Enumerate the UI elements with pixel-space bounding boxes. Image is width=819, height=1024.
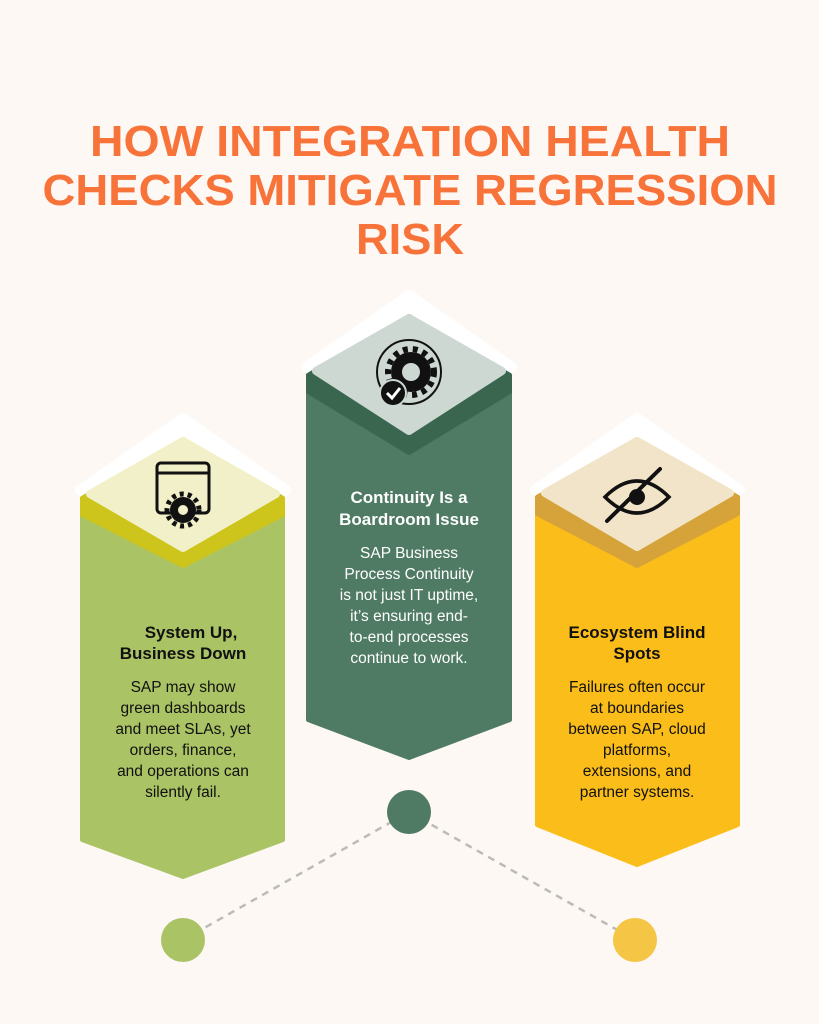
body text: it’s ensuring end- — [350, 608, 468, 625]
body text: between SAP, cloud — [568, 721, 706, 738]
dot: left — [161, 918, 205, 962]
body text: at boundaries — [590, 700, 684, 717]
dot: right — [613, 918, 657, 962]
title: HOW INTEGRATION HEALTH — [90, 117, 730, 166]
connector lines — [183, 812, 635, 940]
body text: and meet SLAs, yet — [115, 721, 251, 738]
heading: Ecosystem Blind — [568, 623, 706, 642]
icon: eye crossed — [605, 469, 669, 521]
icon: window with gear — [157, 463, 209, 526]
panel: ecosystem blind spots — [535, 418, 740, 865]
title: CHECKS MITIGATE REGRESSION — [42, 166, 778, 215]
body text: platforms, — [603, 742, 671, 759]
body text: SAP Business — [360, 545, 458, 562]
body text: continue to work. — [350, 650, 468, 667]
title: RISK — [356, 215, 464, 264]
dot: middle — [387, 790, 431, 834]
heading: Continuity Is a — [350, 488, 468, 507]
body text: to-end processes — [350, 629, 469, 646]
body text: orders, finance, — [130, 742, 236, 759]
heading: System Up, — [145, 623, 237, 642]
body text: Process Continuity — [344, 566, 474, 583]
heading: Business Down — [120, 644, 246, 663]
body text: Failures often occur — [569, 679, 705, 696]
title — [42, 117, 778, 264]
icon: gear with check — [377, 340, 441, 406]
panel: system up business down — [80, 418, 286, 877]
body text: silently fail. — [145, 784, 221, 801]
body text: is not just IT uptime, — [340, 587, 478, 604]
body text: partner systems. — [580, 784, 694, 801]
heading: Boardroom Issue — [339, 510, 479, 529]
body text: SAP may show — [131, 679, 236, 696]
panel: continuity — [306, 295, 512, 758]
body text: green dashboards — [121, 700, 246, 717]
heading: Spots — [613, 644, 661, 663]
body text: and operations can — [117, 763, 249, 780]
body text: extensions, and — [583, 763, 691, 780]
